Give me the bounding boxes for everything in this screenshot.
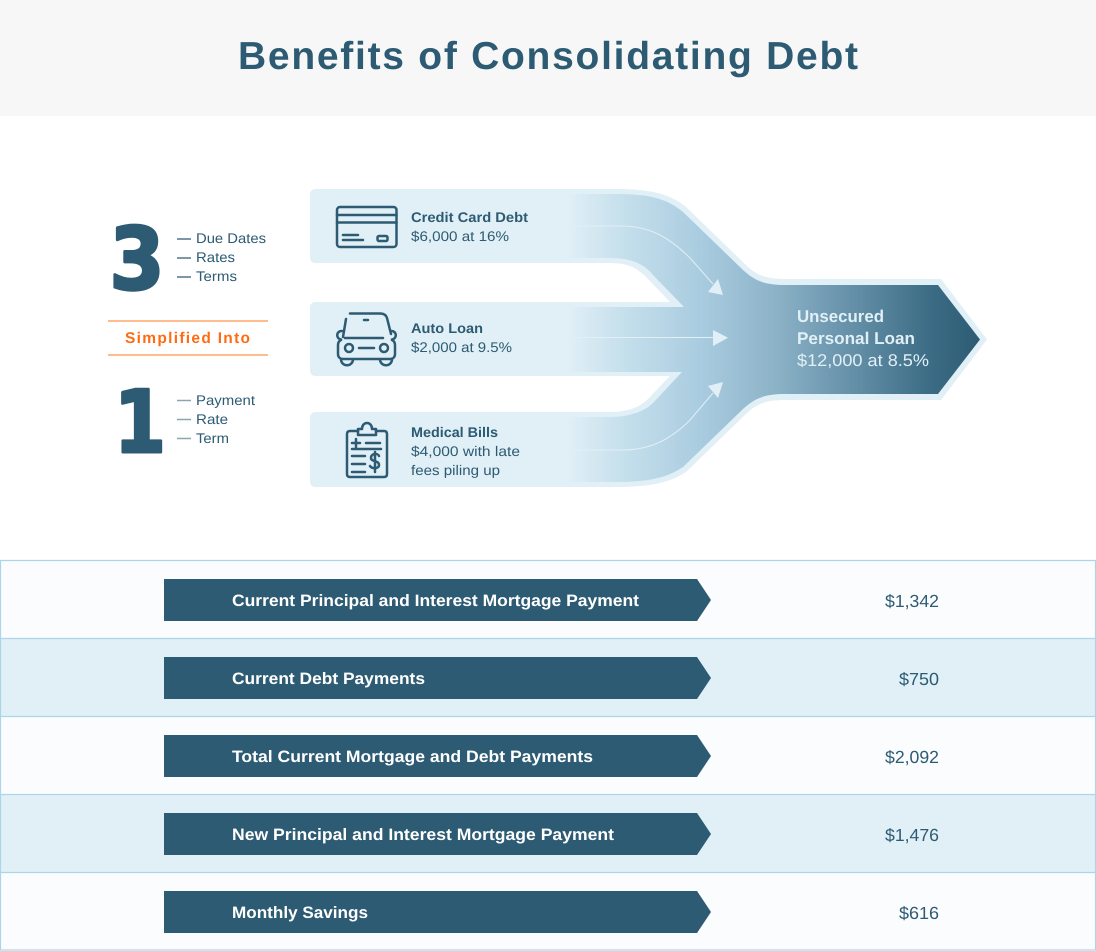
- icon: medical clipboard: [347, 423, 387, 477]
- title: Benefits of Consolidating Debt: [238, 35, 858, 78]
- numeral 1: 1: [114, 373, 166, 473]
- list: due dates, rates, terms: Terms: [196, 268, 237, 284]
- row 3: total current payments: [1, 717, 1095, 794]
- text: auto loan: Auto Loan: [411, 320, 483, 336]
- text: credit card debt: $6,000 at 16%: [411, 228, 509, 244]
- arrow: auto loan to loan: [570, 330, 728, 346]
- text: medical bills: $4,000 with late: [411, 443, 520, 459]
- row 3: total current payments: $2,092: [885, 747, 939, 767]
- list: payment, rate, term: Rate: [196, 411, 228, 427]
- text: auto loan: [411, 320, 512, 355]
- flow halo background: [310, 189, 987, 487]
- numeral 3: 3: [110, 210, 164, 310]
- row 2: current debt payments: [1, 639, 1095, 716]
- row 1: current mortgage payment: $1,342: [885, 591, 939, 611]
- text: unsecured personal loan: [797, 307, 929, 370]
- row 4: new mortgage payment: $1,476: [885, 825, 939, 845]
- icon: credit card: [337, 207, 396, 247]
- arrow: credit card to loan: [570, 226, 723, 295]
- row 2: current debt payments: Current Debt Payments: [232, 670, 425, 688]
- text: auto loan: $2,000 at 9.5%: [411, 339, 512, 355]
- list: payment, rate, term: Term: [196, 430, 229, 446]
- panel: three to one summary: [108, 210, 268, 473]
- row 4: new mortgage payment: [1, 795, 1095, 872]
- row 1: current mortgage payment: Current Principal and Interest Mortgage Payment: [232, 592, 640, 610]
- text: unsecured personal loan: Personal Loan: [797, 329, 915, 348]
- list: due dates, rates, terms: Due Dates: [196, 230, 266, 246]
- text: unsecured personal loan: $12,000 at 8.5%: [797, 351, 929, 370]
- list: payment, rate, term: Payment: [196, 392, 255, 408]
- row 5: monthly savings: Monthly Savings: [232, 904, 368, 922]
- row 5: monthly savings: $616: [899, 903, 939, 923]
- list: due dates, rates, terms: Rates: [196, 249, 235, 265]
- diagram: debts merging into one loan: [310, 189, 987, 487]
- list: payment, rate, term: [177, 392, 255, 446]
- icon: car: [337, 314, 396, 365]
- row 5: monthly savings: [1, 873, 1095, 950]
- flow gradient arrow: [568, 194, 980, 482]
- arrow: medical bills to loan: [570, 382, 723, 450]
- text: medical bills: Medical Bills: [411, 424, 498, 440]
- row 2: current debt payments: $750: [899, 669, 939, 689]
- list: due dates, rates, terms: [177, 230, 266, 284]
- text: unsecured personal loan: Unsecured: [797, 307, 884, 326]
- text: credit card debt: [411, 209, 528, 244]
- row 3: total current payments: Total Current Mortgage and Debt Payments: [232, 748, 593, 766]
- text: credit card debt: Credit Card Debt: [411, 209, 528, 225]
- header band: [0, 0, 1096, 116]
- text: medical bills: [411, 424, 520, 478]
- row 4: new mortgage payment: New Principal and Interest Mortgage Payment: [232, 826, 615, 844]
- simplified into label: Simplified Into: [125, 330, 250, 347]
- simplified into label: [108, 321, 268, 355]
- row 1: current mortgage payment: [1, 561, 1095, 638]
- text: medical bills: fees piling up: [411, 462, 500, 478]
- panel: payment comparison table: [0, 560, 1096, 950]
